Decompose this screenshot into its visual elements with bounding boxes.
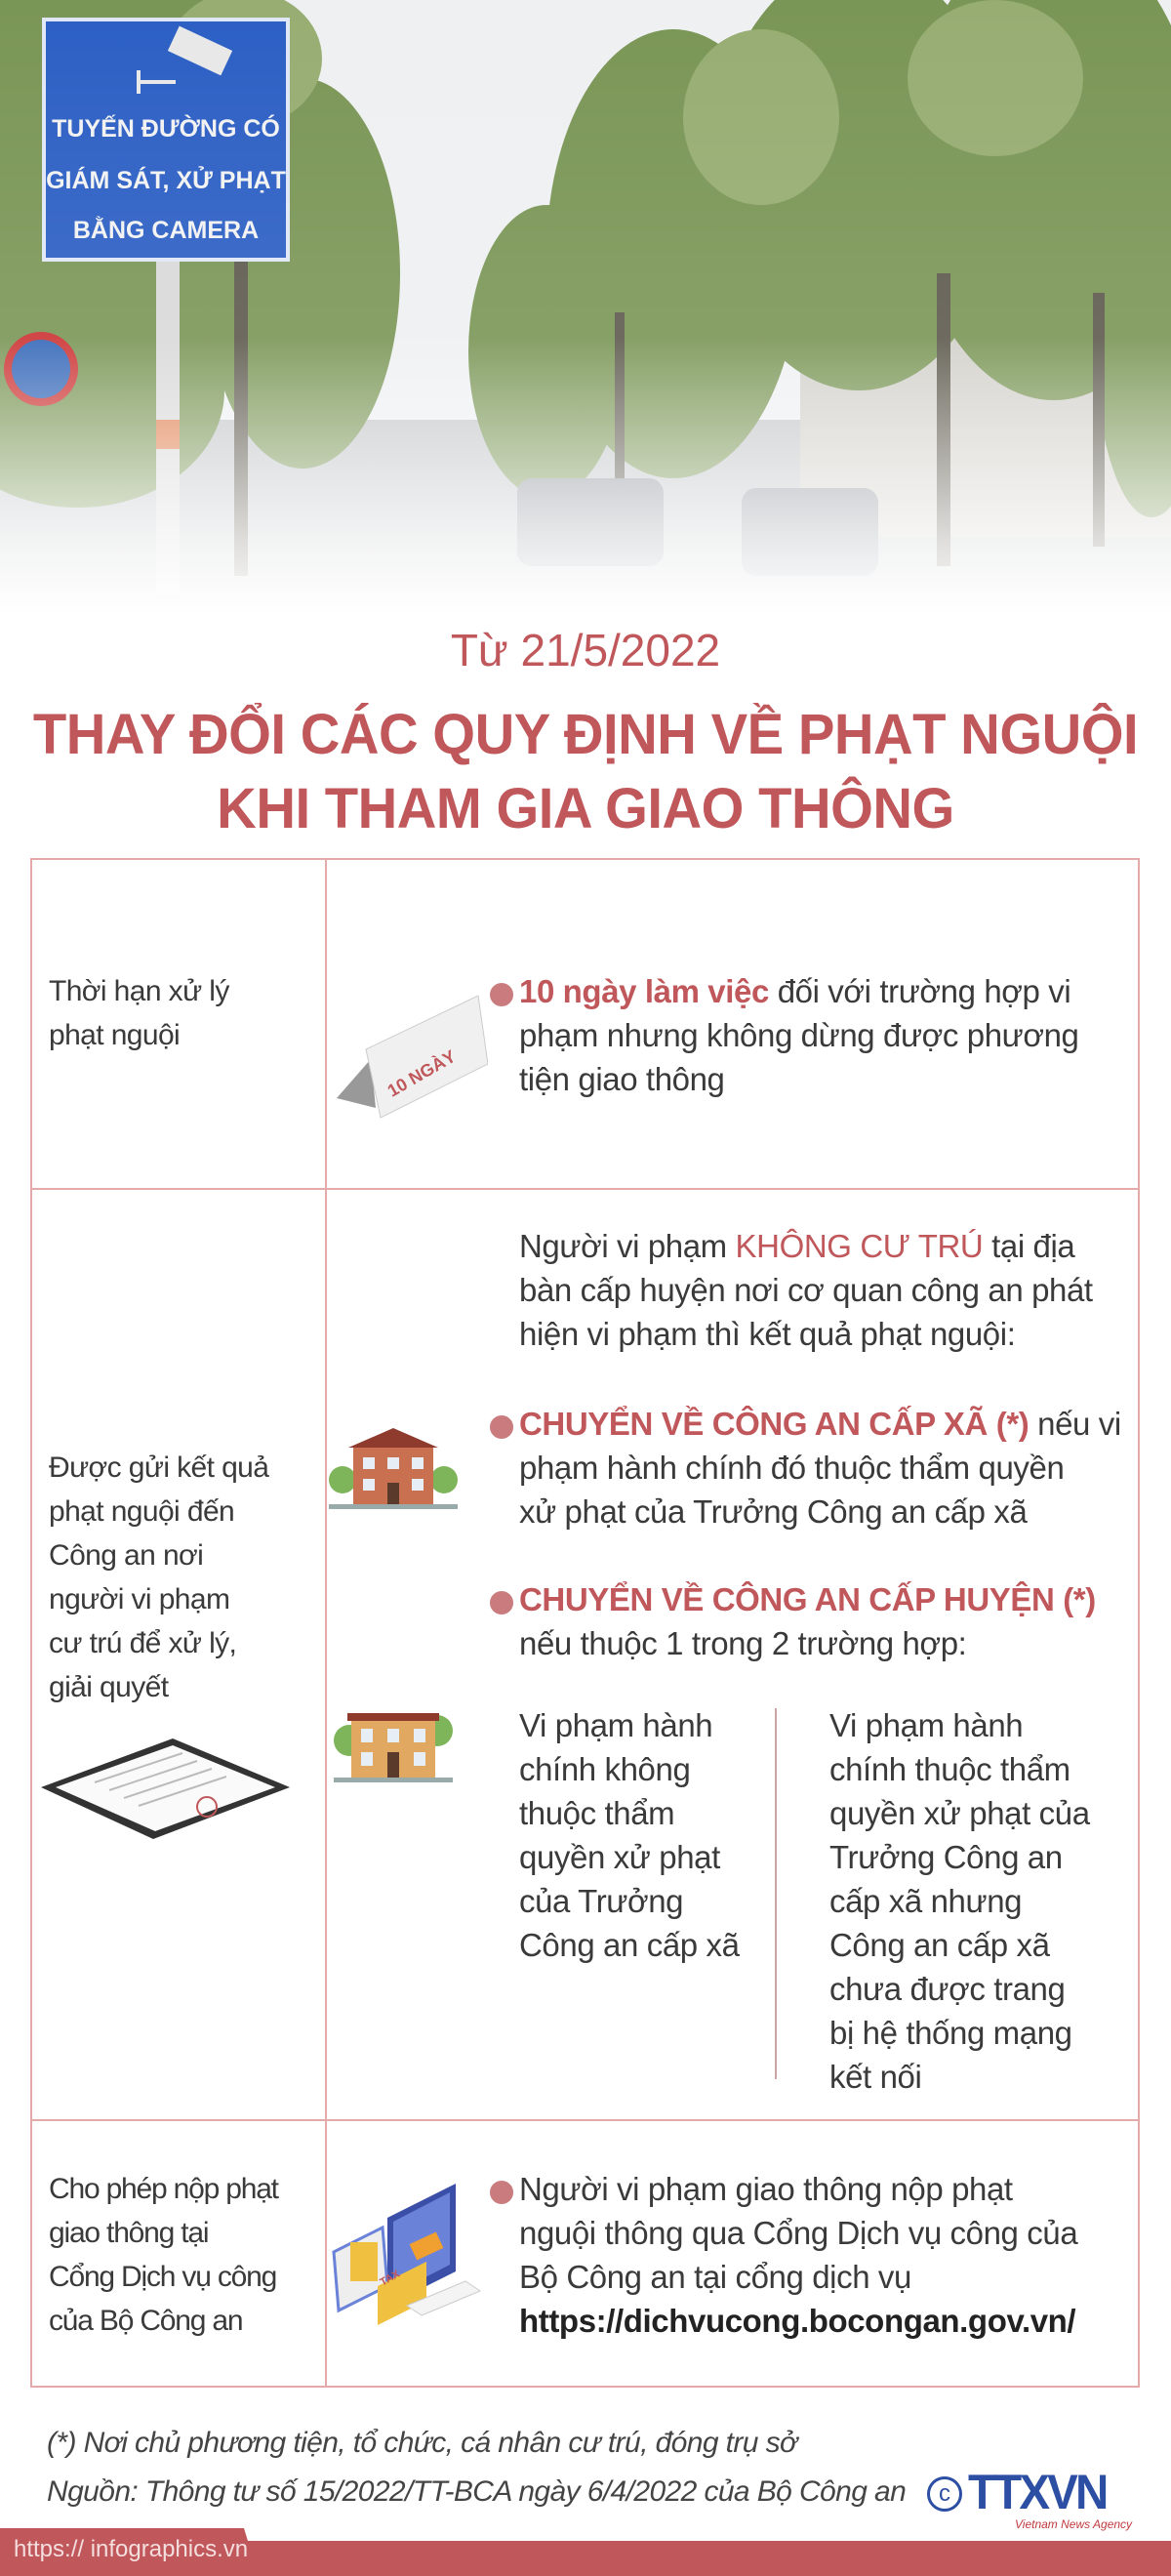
row 1 label (49, 975, 230, 1051)
icon: calendar 10 ngay (337, 995, 488, 1119)
row 1 content (490, 973, 1079, 1097)
row 3 label: Cho phép nộp phạt (49, 2173, 278, 2205)
table grid (30, 858, 1140, 2388)
bullet: commune police: phạm hành chính đó thuộc thẩm quyền (519, 1450, 1064, 1486)
sub case 1: quyền xử phạt (519, 1839, 720, 1875)
row 3 label: của Bộ Công an (49, 2305, 242, 2337)
bullet: district police: nếu thuộc 1 trong 2 trường hợp: (519, 1625, 966, 1661)
row 3 content: nguội thông qua Cổng Dịch vụ công của (519, 2215, 1077, 2251)
row 1 label: Thời hạn xử lý (49, 975, 229, 1007)
header photo (0, 0, 1171, 576)
date subtitle: Từ 21/5/2022 (451, 625, 720, 675)
icon: clipboard document (41, 1738, 290, 1839)
row 3 content: Người vi phạm giao thông nộp phạt (519, 2171, 1013, 2207)
icon: calendar 10 ngay: 10 NGÀY (384, 1045, 459, 1101)
icon: building district (334, 1713, 453, 1782)
sub case 2: kết nối (829, 2059, 921, 2095)
bullet: district police: CHUYỂN VỀ CÔNG AN CẤP HUYỆN (*) (519, 1581, 1096, 1617)
source: Nguồn: Thông tư số 15/2022/TT-BCA ngày 6/4/2022 của Bộ Công an (47, 2475, 906, 2508)
row 2 label: người vi phạm (49, 1583, 229, 1615)
row 2 intro text: Người vi phạm KHÔNG CƯ TRÚ tại địa (519, 1228, 1074, 1264)
sub case 2 (829, 1707, 1091, 2095)
camera sign (44, 20, 288, 260)
logo: TTXVN (927, 2465, 1132, 2531)
sub case 2: chính thuộc thẩm (829, 1751, 1070, 1787)
footer tab url: https:// infographics.vn (14, 2536, 248, 2562)
row 3 label (49, 2173, 279, 2337)
main title (33, 703, 1138, 840)
header photo: TUYẾN ĐƯỜNG CÓ (52, 113, 280, 143)
bullet: commune police: xử phạt của Trưởng Công an cấp xã (519, 1493, 1027, 1530)
row 3 content (490, 2171, 1078, 2339)
row 3 label: Cổng Dịch vụ công (49, 2261, 276, 2293)
sub case 1: Vi phạm hành (519, 1707, 712, 1743)
row 3 content: https://dichvucong.bocongan.gov.vn/ (519, 2303, 1075, 2339)
no parking sign (4, 332, 78, 406)
icon: building commune (329, 1428, 458, 1509)
logo: TTXVN: TTXVN (968, 2465, 1106, 2519)
footer bar (0, 2541, 1171, 2576)
sub case 1: Công an cấp xã (519, 1927, 740, 1963)
icon: online payment computer (332, 2184, 481, 2325)
sub case 2: Vi phạm hành (829, 1707, 1023, 1743)
row 2 label: giải quyết (49, 1671, 168, 1703)
bullet: commune police: CHUYỂN VỀ CÔNG AN CẤP XÃ (*) nếu vi (519, 1406, 1121, 1442)
row 2 label: cư trú để xử lý, (49, 1627, 236, 1659)
sub case 2: cấp xã nhưng (829, 1883, 1022, 1919)
row 2 label (49, 1452, 269, 1703)
row 3 label: giao thông tại (49, 2217, 208, 2249)
row 2 intro text (519, 1228, 1093, 1352)
sub case 2: chưa được trang (829, 1971, 1065, 2007)
main title: THAY ĐỔI CÁC QUY ĐỊNH VỀ PHẠT NGUỘI (33, 703, 1138, 766)
row 1 content: tiện giao thông (519, 1061, 725, 1097)
sub case 1: của Trưởng (519, 1883, 683, 1919)
row 2 intro text: bàn cấp huyện nơi cơ quan công an phát (519, 1272, 1093, 1308)
header photo: GIÁM SÁT, XỬ PHẠT (46, 165, 286, 194)
sub case 2: Trưởng Công an (829, 1839, 1063, 1875)
sub case 1: chính không (519, 1751, 690, 1787)
footnote: (*) Nơi chủ phương tiện, tổ chức, cá nhân cư trú, đóng trụ sở (47, 2427, 797, 2459)
logo: TTXVN: c (939, 2480, 950, 2507)
icon: online payment computer: TAX (379, 2268, 402, 2289)
row 2 label: Công an nơi (49, 1539, 203, 1572)
row 2 label: Được gửi kết quả (49, 1452, 268, 1484)
sub case 2: bị hệ thống mạng (829, 2015, 1072, 2051)
main title: KHI THAM GIA GIAO THÔNG (217, 777, 954, 840)
header photo: BẰNG CAMERA (73, 216, 259, 244)
sign pole (156, 254, 180, 595)
row 2 intro text: hiện vi phạm thì kết quả phạt nguội: (519, 1316, 1015, 1352)
logo: TTXVN: Vietnam News Agency (1015, 2517, 1132, 2531)
sub case 1 (519, 1707, 740, 1963)
row 1 content: phạm nhưng không dừng được phương (519, 1017, 1079, 1053)
bullet: district police (490, 1581, 1096, 1661)
sub case 2: Công an cấp xã (829, 1927, 1050, 1963)
row 3 content: Bộ Công an tại cổng dịch vụ (519, 2259, 911, 2295)
row 2 label: phạt nguội đến (49, 1495, 234, 1528)
bullet: commune police (490, 1406, 1121, 1530)
row 1 label: phạt nguội (49, 1019, 180, 1051)
row 1 content: 10 ngày làm việc đối với trường hợp vi (519, 973, 1070, 1009)
sub case 1: thuộc thẩm (519, 1795, 674, 1831)
divider between sub cases (775, 1708, 777, 2079)
sub case 2: quyền xử phạt của (829, 1795, 1090, 1831)
